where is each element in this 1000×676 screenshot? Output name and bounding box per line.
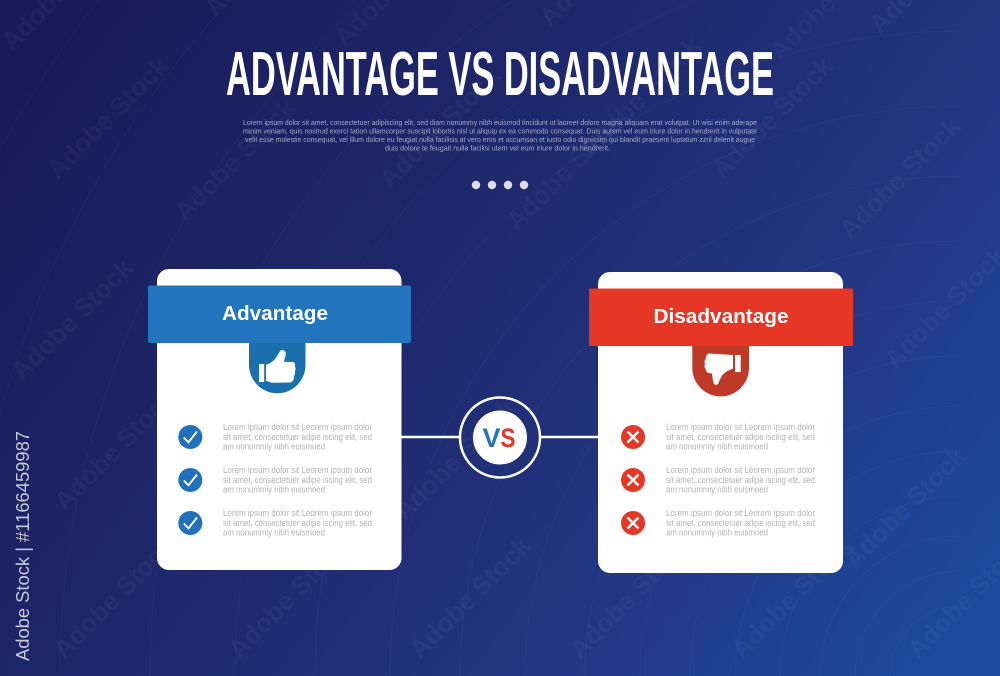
panel: disadvantage bbox=[589, 272, 853, 573]
disadvantage banner bbox=[589, 288, 853, 346]
infographic canvas: Adobe Stock bbox=[388, 392, 522, 526]
description paragraph bbox=[243, 118, 757, 152]
icon: thumbs down bbox=[704, 354, 741, 385]
infographic canvas: Adobe Stock bbox=[500, 102, 634, 236]
advantage item text: am nonummiy nibh euismoed bbox=[223, 528, 325, 538]
advantage item text bbox=[223, 422, 372, 452]
advantage item text bbox=[223, 508, 372, 538]
infographic canvas: Adobe Stock bbox=[373, 60, 507, 194]
pagination dots bbox=[472, 181, 528, 189]
infographic canvas: Adobe Stock bbox=[705, 50, 839, 184]
infographic canvas: Adobe Stock bbox=[41, 50, 175, 184]
advantage item text bbox=[223, 465, 372, 494]
infographic canvas: Adobe Stock bbox=[838, 440, 972, 574]
icon: check bbox=[178, 511, 202, 535]
advantage item text: am nonummiy nibh euismoed bbox=[223, 442, 325, 452]
description paragraph: velit esse molestie consequat, vel illum dolore eu feugiat nulla facilisis at vero eros et accumsan et iusto odio dignissim qui blandit praesent luptatum zzril delenit augue bbox=[245, 135, 755, 144]
advantage item text: Lorem ipsum dolor sit Leorem ipsum dolor bbox=[223, 422, 372, 432]
description paragraph: duis dolore te feugait nulla facilisi utem vel eum iriure dolor in hendrerit. bbox=[385, 144, 610, 152]
disadvantage item text: Lorem ipsum dolor sit Leorem ipsum dolor bbox=[666, 422, 815, 432]
vs badge: V bbox=[482, 423, 500, 453]
advantage item text: Lorem ipsum dolor sit Leorem ipsum dolor bbox=[223, 508, 372, 518]
infographic canvas: Adobe Stock bbox=[47, 530, 181, 664]
infographic canvas: Adobe Stock bbox=[5, 252, 139, 386]
advantage item text: sit amet, consectetuer adipe iscing elit, sed bbox=[223, 518, 372, 528]
disadvantage item text: sit amet, consectetuer adipe iscing elit, sed bbox=[666, 518, 815, 528]
connector lines bbox=[400, 436, 599, 438]
disadvantage item text: sit amet, consectetuer adipe iscing elit, sed bbox=[666, 475, 815, 485]
advantage item text: am nonummiy nibh euismoed bbox=[223, 484, 325, 494]
disadvantage item text bbox=[666, 465, 815, 494]
disadvantage item text bbox=[666, 422, 815, 452]
disadvantage heading: Disadvantage bbox=[654, 306, 788, 328]
description paragraph: minim veniam, quis nostrud exerci tation ullamcorper suscipit lobortis nisl ut aliquip ex ea commodo consequat. Duis autem vel eum iriure dolor in hendrerit in vulputate bbox=[243, 126, 757, 136]
disadvantage item text: sit amet, consectetuer adipe iscing elit, sed bbox=[666, 432, 815, 442]
disadvantage item text: Lorem ipsum dolor sit Leorem ipsum dolor bbox=[666, 508, 815, 518]
advantage item text: Lorem ipsum dolor sit Leorem ipsum dolor bbox=[223, 465, 372, 475]
advantage list bbox=[178, 422, 372, 538]
infographic canvas: Adobe Stock bbox=[573, 30, 707, 164]
disadvantage item text: Lorem ipsum dolor sit Leorem ipsum dolor bbox=[666, 465, 815, 475]
advantage card background bbox=[157, 269, 402, 570]
disadvantage card background bbox=[598, 272, 843, 573]
panel: advantage bbox=[148, 269, 411, 570]
disadvantage item text bbox=[666, 508, 815, 538]
icon: cross bbox=[621, 511, 645, 535]
disadvantage item text: am nonummiy nibh euismoed bbox=[666, 484, 768, 494]
disadvantage item text: am nonummiy nibh euismoed bbox=[666, 528, 768, 538]
icon: cross bbox=[621, 425, 645, 449]
infographic canvas: Adobe Stock bbox=[403, 530, 537, 664]
icon: thumbs up bbox=[259, 350, 296, 383]
icon: check bbox=[178, 468, 202, 492]
advantage banner bbox=[148, 286, 411, 343]
icon: cross bbox=[621, 468, 645, 492]
infographic canvas: Adobe Stock bbox=[833, 110, 967, 244]
disadvantage item text: am nonummiy nibh euismoed bbox=[666, 442, 768, 452]
icon: check bbox=[178, 425, 202, 449]
infographic canvas: Adobe Stock bbox=[563, 530, 697, 664]
infographic canvas: Adobe Stock bbox=[48, 382, 182, 516]
advantage item text: sit amet, consectetuer adipe iscing elit, sed bbox=[223, 432, 372, 442]
description paragraph: Lorem ipsum dolor sit amet, consectetuer adipiscing elit, sed diam nonummy nibh euismod tincidunt ut laoreet dolore magna aliquam erat volutpat. Ut wisi enim aderape bbox=[243, 118, 757, 127]
infographic canvas: Adobe Stock bbox=[725, 530, 859, 664]
infographic canvas: Adobe Stock bbox=[222, 530, 356, 664]
disadvantage list bbox=[621, 422, 815, 538]
advantage heading: Advantage bbox=[222, 303, 328, 325]
disadvantage icon tab bbox=[692, 343, 749, 396]
vs badge bbox=[460, 398, 540, 478]
advantage item text: sit amet, consectetuer adipe iscing elit, sed bbox=[223, 475, 372, 485]
vs badge: S bbox=[500, 423, 516, 453]
stock image id label: Adobe Stock | #1166459987 bbox=[13, 431, 33, 661]
advantage icon tab bbox=[249, 340, 306, 393]
infographic canvas: Adobe Stock bbox=[168, 92, 302, 226]
